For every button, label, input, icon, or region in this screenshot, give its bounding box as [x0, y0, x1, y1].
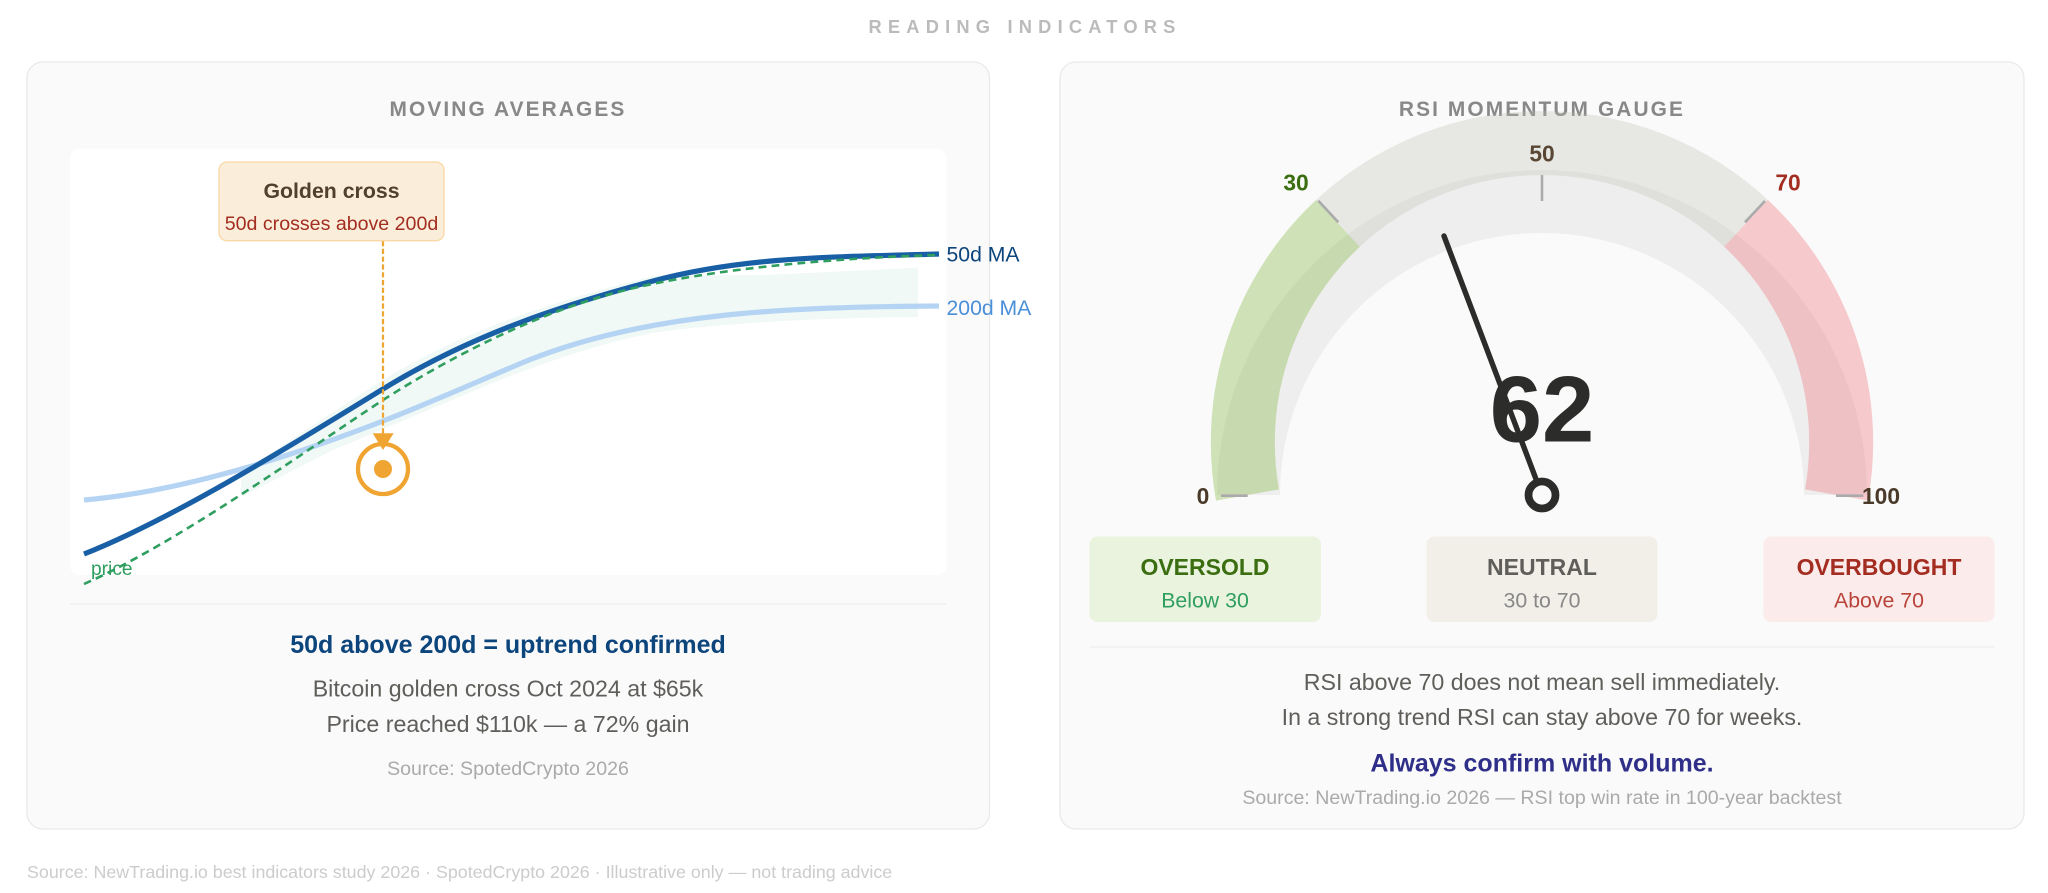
zone card: neutral — [1426, 536, 1658, 622]
scale labels — [1197, 141, 1900, 509]
heading: RSI gauge: RSI MOMENTUM GAUGE — [1399, 98, 1685, 121]
needle — [1444, 236, 1556, 508]
source: RSI: Source: NewTrading.io 2026 — RSI top win rate in 100-year backtest — [1242, 787, 1842, 809]
callout: golden cross: 50d crosses above 200d — [225, 213, 438, 235]
text: RSI note: In a strong trend RSI can stay above 70 for weeks. — [1282, 704, 1802, 730]
text: confirm with volume: Always confirm with volume. — [1370, 750, 1714, 778]
title: READING INDICATORS — [868, 16, 1182, 37]
scale labels: 0 — [1197, 483, 1209, 509]
zone card: overbought: OVERBOUGHT — [1797, 554, 1961, 580]
source: moving averages: Source: SpotedCrypto 2026 — [387, 758, 629, 780]
footer source: Source: NewTrading.io best indicators study 2026 · SpotedCrypto 2026 · Illustrative only — not trading advice — [27, 862, 892, 882]
label: 50d MA: 50d MA — [946, 244, 1020, 266]
zone card: overbought — [1764, 536, 1994, 622]
gauge — [1197, 141, 1900, 509]
zone card: neutral: NEUTRAL — [1487, 554, 1597, 580]
callout: golden cross: Golden cross — [263, 179, 400, 203]
zone: overbought arc — [1746, 223, 1841, 495]
line: price — [84, 255, 939, 584]
zone: neutral arc — [1338, 143, 1746, 223]
label: 200d MA: 200d MA — [946, 297, 1032, 320]
scale labels: 70 — [1775, 170, 1801, 196]
text: uptrend takeaway: 50d above 200d = uptrend confirmed — [290, 631, 726, 659]
zone: oversold arc — [1243, 223, 1338, 495]
shaded band between averages — [241, 268, 918, 497]
zone card: oversold — [1090, 536, 1321, 622]
panel: RSI gauge — [1060, 62, 2024, 829]
text: RSI note: RSI above 70 does not mean sell immediately. — [1304, 669, 1780, 695]
chart: moving average lines — [70, 148, 1032, 584]
line: 50d MA — [84, 254, 939, 554]
zone card: neutral: 30 to 70 — [1504, 588, 1581, 612]
text: RSI note — [1282, 669, 1802, 730]
text: bitcoin golden cross note — [313, 676, 704, 737]
line: 200d MA — [84, 306, 939, 500]
scale labels: 50 — [1529, 141, 1555, 167]
label: price: price — [91, 559, 133, 580]
zone card: overbought: Above 70 — [1834, 588, 1924, 612]
text: bitcoin golden cross note: Price reached $110k — a 72% gain — [326, 711, 690, 737]
text: bitcoin golden cross note: Bitcoin golden cross Oct 2024 at $65k — [313, 676, 704, 702]
gauge value: 62 — [1490, 356, 1594, 462]
scale labels: 30 — [1283, 170, 1309, 196]
ticks — [1221, 175, 1863, 496]
marker: golden cross point — [358, 241, 408, 494]
zone card: oversold: Below 30 — [1161, 588, 1249, 612]
zone card: oversold: OVERSOLD — [1140, 554, 1270, 580]
scale labels: 100 — [1862, 483, 1900, 509]
heading: moving averages: MOVING AVERAGES — [390, 98, 626, 121]
gauge track — [1248, 201, 1836, 495]
callout: golden cross — [219, 162, 444, 241]
panel: moving averages — [27, 62, 1032, 829]
